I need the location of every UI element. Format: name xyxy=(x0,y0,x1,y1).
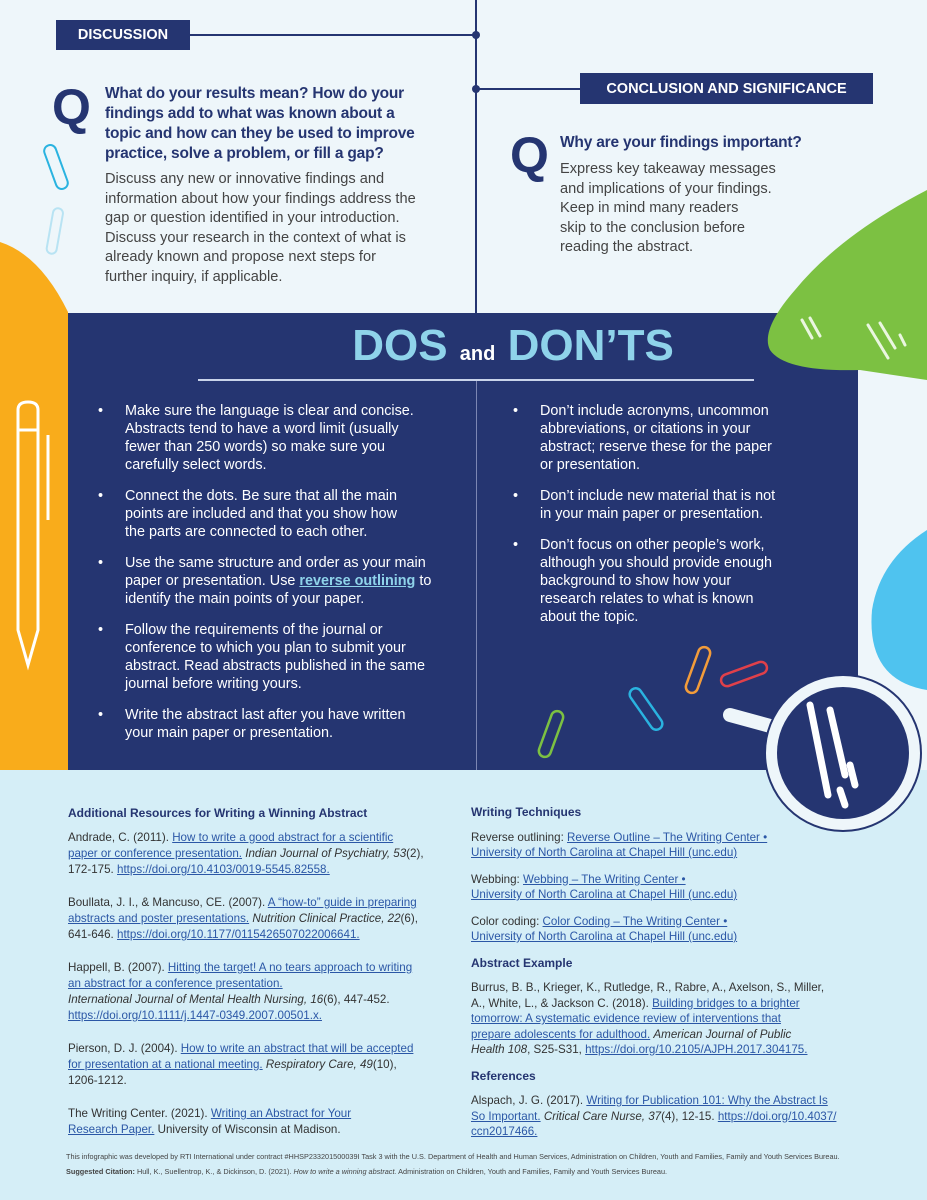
bottom background xyxy=(0,770,927,1200)
donts list: research relates to what is known xyxy=(540,591,754,607)
discussion question: topic and how can they be used to improve xyxy=(105,125,415,142)
discussion body: further inquiry, if applicable. xyxy=(105,269,282,285)
resources right column: Abstract Example xyxy=(471,956,572,970)
resources left column: Additional Resources for Writing a Winning Abstract xyxy=(68,806,367,820)
conclusion body: Keep in mind many readers xyxy=(560,200,738,216)
resources left column: 641-646. https://doi.org/10.1177/0115426507022006641. xyxy=(68,928,360,941)
donts list: abbreviations, or citations in your xyxy=(540,421,750,437)
label: conclusion xyxy=(580,73,873,104)
resources right column: Webbing: Webbing – The Writing Center • xyxy=(471,872,686,886)
dos list: the parts are connected to each other. xyxy=(125,524,367,540)
conclusion question: Why are your findings important? xyxy=(560,134,802,151)
dos list: conference to which you plan to submit your xyxy=(125,640,406,656)
footer: Suggested Citation: Hull, K., Suellentrop, K., & Dickinson, D. (2021). How to write a winning abstract. Administration on Children, Youth and Families, Family and Youth Services Bureau. xyxy=(66,1167,667,1176)
Q icon: Q xyxy=(510,127,549,183)
resources left column: abstracts and poster presentations. Nutrition Clinical Practice, 22(6), xyxy=(68,912,418,925)
conclusion body: reading the abstract. xyxy=(560,239,693,255)
dos list: fewer than 250 words) so make sure you xyxy=(125,439,385,455)
resources right column: Reverse outlining: Reverse Outline – The Writing Center • xyxy=(471,830,767,844)
resources right column: References xyxy=(471,1068,536,1082)
resources left column: 172-175. https://doi.org/10.4103/0019-5545.82558. xyxy=(68,863,330,876)
resources right column: Alspach, J. G. (2017). Writing for Publication 101: Why the Abstract Is xyxy=(471,1094,828,1107)
dos list: Follow the requirements of the journal or xyxy=(125,622,383,638)
discussion body: Discuss your research in the context of what is xyxy=(105,230,406,246)
footer xyxy=(66,1152,840,1176)
heading: DOS and DON’TS xyxy=(352,321,674,370)
donts list: about the topic. xyxy=(540,609,638,625)
conclusion body: and implications of your findings. xyxy=(560,181,772,197)
resources left column: The Writing Center. (2021). Writing an Abstract for Your xyxy=(68,1107,351,1120)
resources left column: Happell, B. (2007). Hitting the target! A no tears approach to writing xyxy=(68,961,412,974)
dos list: your main paper or presentation. xyxy=(125,725,333,741)
donts list: Don’t focus on other people’s work, xyxy=(540,537,765,553)
resources right column: ccn2017466. xyxy=(471,1125,537,1138)
resources left column: 1206-1212. xyxy=(68,1074,127,1087)
connector conclusion xyxy=(476,88,580,90)
donts list: in your main paper or presentation. xyxy=(540,506,763,522)
resources left column: Boullata, J. I., & Mancuso, CE. (2007). A “how-to” guide in preparing xyxy=(68,896,417,909)
donts list: abstract; reserve these for the paper xyxy=(540,439,772,455)
footer: This infographic was developed by RTI International under contract #HHSP233201500039I Task 3 with the U.S. Department of Health and Human Services, Administration on Children, Youth and Families, Family and Youth Services Bureau. xyxy=(66,1152,840,1161)
resources right column: University of North Carolina at Chapel Hill (unc.edu) xyxy=(471,846,737,859)
dos list: Make sure the language is clear and concise. xyxy=(125,403,414,419)
conclusion body xyxy=(560,161,776,255)
dos list: Write the abstract last after you have written xyxy=(125,707,405,723)
resources right column: Color coding: Color Coding – The Writing Center • xyxy=(471,914,727,928)
dos list: points are included and that you show how xyxy=(125,506,397,522)
resources left column: paper or conference presentation. Indian Journal of Psychiatry, 53(2), xyxy=(68,847,424,860)
dos list: paper or presentation. Use reverse outlining to xyxy=(125,573,431,589)
resources right column: A., White, L., & Jackson C. (2018). Building bridges to a brighter xyxy=(471,996,800,1010)
resources left column: Andrade, C. (2011). How to write a good abstract for a scientific xyxy=(68,831,393,844)
resources left column: for presentation at a national meeting. Respiratory Care, 49(10), xyxy=(68,1058,397,1071)
dos list: Use the same structure and order as your main xyxy=(125,555,426,571)
connector discussion xyxy=(190,34,477,36)
resources right column: University of North Carolina at Chapel Hill (unc.edu) xyxy=(471,930,737,943)
icon: pen xyxy=(16,400,50,670)
dos list: carefully select words. xyxy=(125,457,267,473)
dos list: Connect the dots. Be sure that all the main xyxy=(125,488,397,504)
resources left column xyxy=(68,806,424,1136)
dos list xyxy=(98,403,431,741)
resources left column: Pierson, D. J. (2004). How to write an abstract that will be accepted xyxy=(68,1042,413,1055)
label: discussion: DISCUSSION xyxy=(78,27,168,43)
discussion body: information about how your findings address the xyxy=(105,191,416,207)
dos and donts panel xyxy=(68,313,858,770)
resources right column: So Important. Critical Care Nurse, 37(4), 12-15. https://doi.org/10.4037/ xyxy=(471,1110,836,1122)
discussion question: What do your results mean? How do your xyxy=(105,85,404,102)
resources left column: Research Paper. University of Wisconsin at Madison. xyxy=(68,1123,341,1136)
donts list: Don’t include acronyms, uncommon xyxy=(540,403,769,419)
dos list: Abstracts tend to have a word limit (usually xyxy=(125,421,399,437)
discussion question: practice, solve a problem, or fill a gap? xyxy=(105,145,384,162)
icon: magnifying glass xyxy=(723,675,922,832)
icon: paper clips panel xyxy=(538,646,768,758)
discussion body: Discuss any new or innovative findings and xyxy=(105,171,384,187)
discussion question xyxy=(105,85,415,162)
conclusion body: Express key takeaway messages xyxy=(560,161,776,177)
resources left column: an abstract for a conference presentation. xyxy=(68,977,283,990)
donts list: Don’t include new material that is not xyxy=(540,488,775,504)
donts list: or presentation. xyxy=(540,457,640,473)
conclusion block xyxy=(510,127,802,255)
conclusion body: skip to the conclusion before xyxy=(560,220,745,236)
discussion body: already known and propose next steps for xyxy=(105,249,376,265)
discussion body xyxy=(105,171,416,285)
icon: paper clips top-left xyxy=(43,144,69,255)
dos list: identify the main points of your paper. xyxy=(125,591,364,607)
discussion block xyxy=(52,79,416,285)
Q icon: Q xyxy=(52,79,91,135)
resources right column: Burrus, B. B., Krieger, K., Rutledge, R., Rabre, A., Axelson, S., Miller, xyxy=(471,981,824,994)
discussion question: findings add to what was known about a xyxy=(105,105,394,122)
dos list: journal before writing yours. xyxy=(125,676,302,692)
donts list: background to show how your xyxy=(540,573,731,589)
resources left column: https://doi.org/10.1111/j.1447-0349.2007.00501.x. xyxy=(68,1009,322,1022)
resources right column: Writing Techniques xyxy=(471,805,581,819)
resources right column: prepare adolescents for adulthood. American Journal of Public xyxy=(471,1028,791,1040)
donts list xyxy=(514,403,776,625)
dos list: abstract. Read abstracts published in the same xyxy=(125,658,425,674)
label: conclusion: CONCLUSION AND SIGNIFICANCE xyxy=(606,80,847,96)
vertical divider xyxy=(475,0,477,313)
resources right column: Health 108, S25-S31, https://doi.org/10.2105/AJPH.2017.304175. xyxy=(471,1043,807,1056)
resources left column: International Journal of Mental Health Nursing, 16(6), 447-452. xyxy=(68,993,390,1006)
label: discussion xyxy=(56,20,190,50)
resources right column xyxy=(471,805,836,1138)
shape: green blob xyxy=(768,190,927,380)
discussion body: gap or question identified in your introduction. xyxy=(105,210,400,226)
resources right column: University of North Carolina at Chapel Hill (unc.edu) xyxy=(471,888,737,901)
donts list: although you should provide enough xyxy=(540,555,772,571)
resources right column: tomorrow: A systematic evidence review of interventions that xyxy=(471,1012,781,1025)
